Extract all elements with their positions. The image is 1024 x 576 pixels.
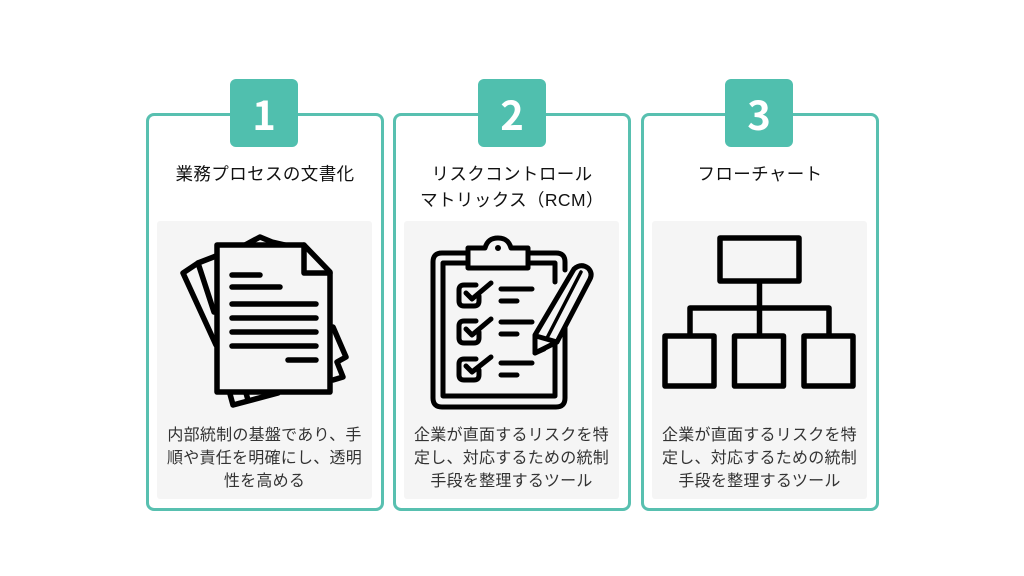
body text 3: 定し、対応するための統制: [662, 450, 857, 467]
heading 2: リスクコントロール: [431, 164, 593, 184]
heading 2: マトリックス（RCM）: [420, 190, 604, 210]
body text 1: 順や責任を明確にし、透明: [167, 450, 362, 467]
number badge 2: 2: [500, 84, 524, 142]
body text 2: [414, 426, 609, 490]
body text 3: [662, 426, 857, 490]
body text 3: 手段を整理するツール: [678, 473, 841, 490]
panel: card 1: [146, 113, 384, 511]
panel: card 2: [393, 113, 631, 511]
panel: card 2 inner: [404, 221, 619, 499]
body text 2: 定し、対応するための統制: [414, 450, 609, 467]
heading 2: [420, 164, 604, 210]
body text 3: 企業が直面するリスクを特: [662, 427, 857, 444]
number badge 1: [230, 79, 298, 147]
heading 1: 業務プロセスの文書化: [176, 164, 354, 184]
panel: card 3: [641, 113, 879, 511]
heading 3: フローチャート: [697, 164, 823, 184]
panel: card 3 inner: [652, 221, 867, 499]
number badge 2: [478, 79, 546, 147]
body text 2: 手段を整理するツール: [430, 473, 593, 490]
body text 2: 企業が直面するリスクを特: [414, 427, 609, 444]
body text 1: 内部統制の基盤であり、手: [167, 427, 362, 444]
number badge 1: 1: [252, 84, 276, 142]
number badge 3: 3: [747, 84, 771, 142]
number badge 3: [725, 79, 793, 147]
panel: card 1 inner: [157, 221, 372, 499]
body text 1: 性を高める: [224, 473, 305, 490]
body text 1: [167, 426, 362, 490]
